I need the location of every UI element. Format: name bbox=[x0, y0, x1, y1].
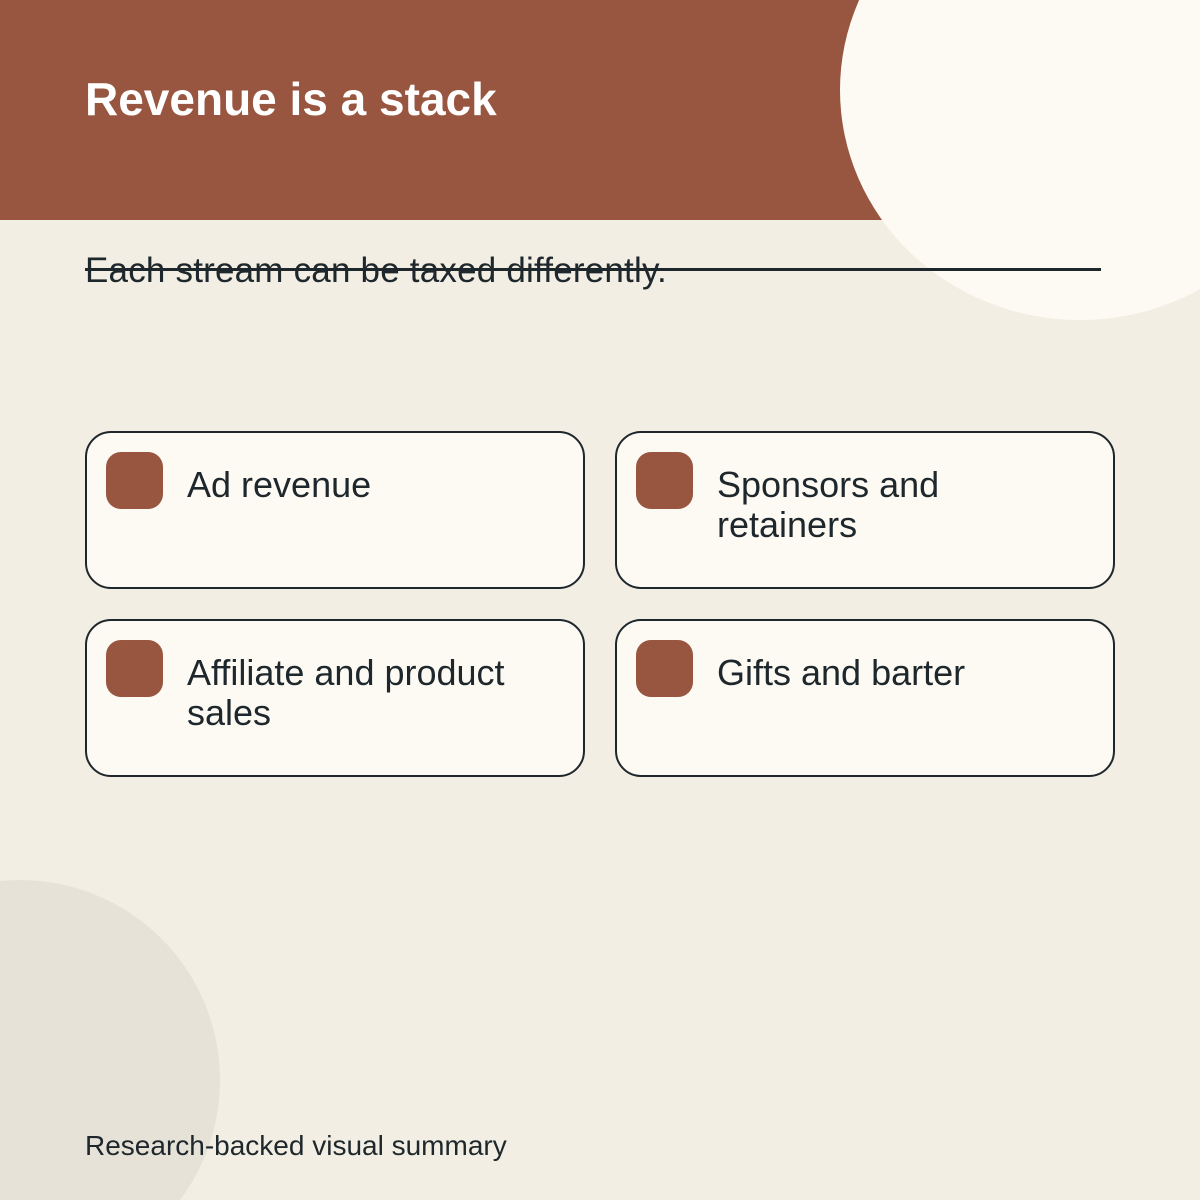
card: Sponsors and retainers bbox=[615, 431, 1115, 589]
footer: Research-backed visual summary bbox=[85, 1130, 507, 1161]
card: Affiliate and product sales: Affiliate and product sales bbox=[187, 652, 505, 733]
strikethrough rule bbox=[85, 268, 1101, 271]
title: Revenue is a stack bbox=[85, 73, 497, 125]
card: Gifts and barter bbox=[615, 619, 1115, 777]
card: Sponsors and retainers: Sponsors and retainers bbox=[717, 464, 939, 545]
card: Ad revenue bbox=[85, 431, 585, 589]
card: Gifts and barter: Gifts and barter bbox=[717, 652, 965, 693]
card: Ad revenue: Ad revenue bbox=[187, 464, 371, 505]
subtitle: Each stream can be taxed differently. bbox=[85, 251, 667, 290]
card: Affiliate and product sales bbox=[85, 619, 585, 777]
